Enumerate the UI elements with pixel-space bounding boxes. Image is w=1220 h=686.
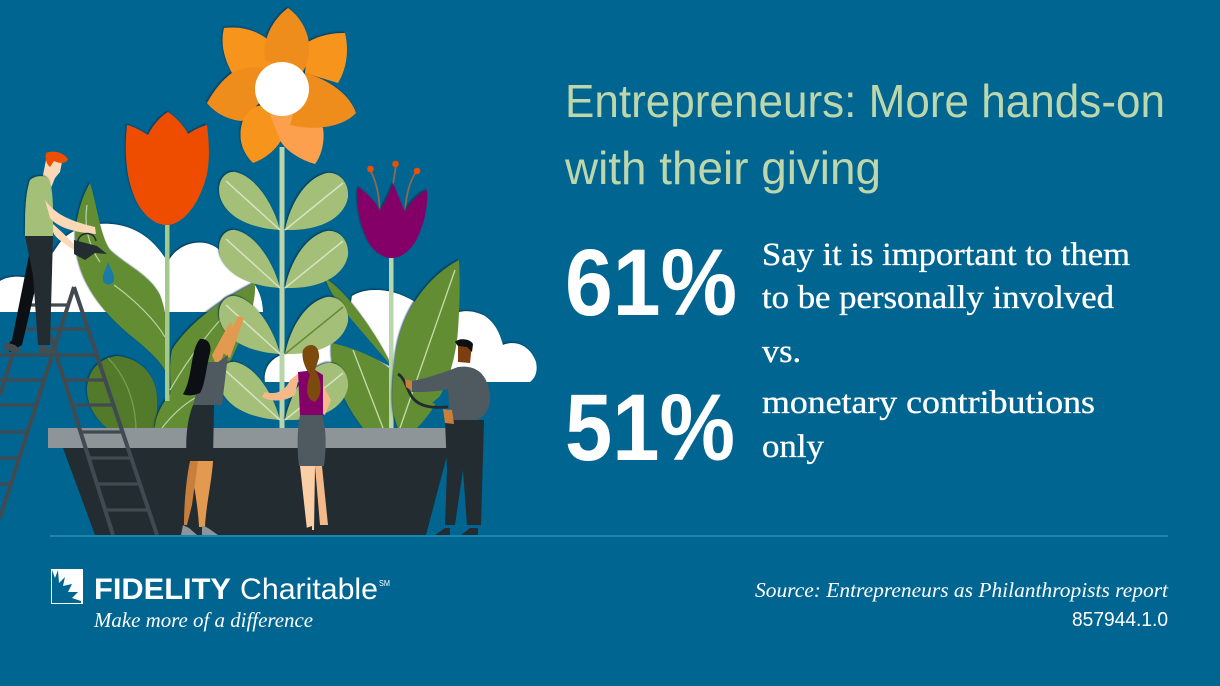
ground divider (50, 535, 1168, 537)
versus: vs. (762, 334, 801, 370)
stat: 61 percent: 61% (565, 230, 737, 336)
title: with their giving (564, 142, 881, 194)
right leaves (325, 278, 393, 428)
stat: 51 percent: 51% (565, 375, 735, 481)
central plant with leaves (219, 147, 348, 430)
stat: 51 percent (565, 375, 1095, 481)
stat: 61 percent: to be personally involved (762, 280, 1115, 316)
stat: 61 percent: Say it is important to them (762, 237, 1130, 273)
logo: Fidelity Charitable: FIDELITY (94, 573, 231, 606)
clouds (0, 224, 537, 382)
tall right leaf (392, 260, 460, 428)
logo: Fidelity Charitable: Charitable (240, 573, 378, 606)
logo: Fidelity Charitable: SM (379, 579, 390, 588)
title: Entrepreneurs: More hands-on (565, 75, 1165, 127)
icon: logo sunburst (51, 569, 83, 604)
man pruning with shears (398, 339, 490, 535)
big left leaf (76, 183, 167, 372)
planter pot (48, 428, 449, 535)
lower round leaf (87, 356, 157, 428)
stat: 61 percent (565, 230, 1130, 336)
woman reaching up (181, 316, 244, 535)
middle left leaf (155, 283, 255, 428)
title (564, 75, 1165, 194)
source note: Source: Entrepreneurs as Philanthropists report (755, 578, 1169, 602)
source note: 857944.1.0 (1072, 609, 1168, 631)
purple tulip (357, 161, 427, 428)
logo: Fidelity Charitable: Make more of a difference (93, 608, 313, 632)
source note (755, 578, 1169, 631)
gardener with watering can (4, 152, 114, 353)
orange tulip (126, 112, 209, 401)
logo: Fidelity Charitable (51, 569, 390, 632)
stat: 51 percent: only (762, 429, 825, 465)
stat: 51 percent: monetary contributions (762, 385, 1095, 421)
orange flower (207, 8, 356, 164)
woman in purple top (262, 345, 331, 535)
illustration: garden scene (0, 8, 537, 535)
ladder (0, 287, 157, 535)
